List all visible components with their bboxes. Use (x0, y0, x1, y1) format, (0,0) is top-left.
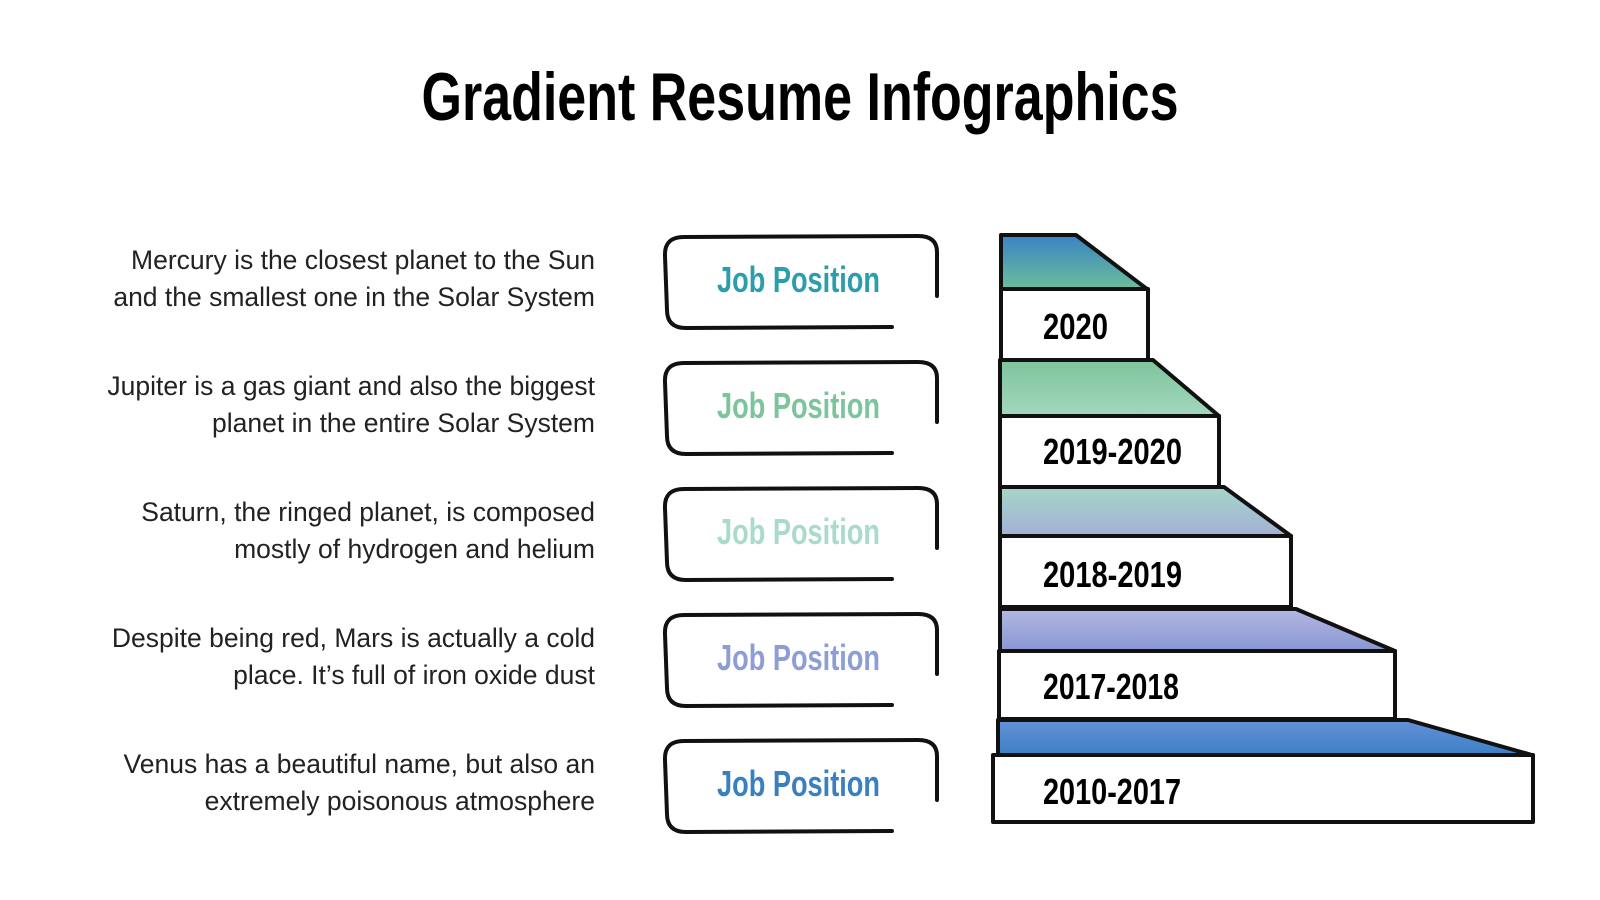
text: venus (124, 749, 595, 816)
year labels (1043, 306, 1182, 812)
job labels (717, 259, 880, 804)
text: jupiter (107, 371, 595, 438)
job labels: Job Position (717, 511, 880, 552)
text: mars: Despite being red, Mars is actually a cold (112, 623, 595, 653)
text: mars (112, 623, 595, 690)
text: saturn: Saturn, the ringed planet, is composed (141, 497, 595, 527)
staircase (993, 235, 1533, 822)
text: saturn (141, 497, 595, 564)
year labels: 2010-2017 (1043, 771, 1181, 812)
title: Gradient Resume Infographics (422, 59, 1178, 135)
year labels: 2017-2018 (1043, 666, 1179, 707)
text: mercury: Mercury is the closest planet to the Sun (131, 245, 595, 275)
job boxes (665, 236, 937, 832)
text: venus: Venus has a beautiful name, but also an (124, 749, 595, 779)
job labels: Job Position (717, 637, 880, 678)
job labels: Job Position (717, 385, 880, 426)
text: jupiter: Jupiter is a gas giant and also the biggest (107, 371, 595, 401)
job labels: Job Position (717, 259, 880, 300)
year labels: 2020 (1043, 306, 1108, 347)
job labels: Job Position (717, 763, 880, 804)
year labels: 2019-2020 (1043, 431, 1182, 472)
year labels: 2018-2019 (1043, 554, 1182, 595)
text: jupiter: planet in the entire Solar System (212, 408, 595, 438)
text: mars: place. It’s full of iron oxide dust (233, 660, 595, 690)
text: mercury (113, 245, 595, 312)
text: saturn: mostly of hydrogen and helium (234, 534, 595, 564)
text: venus: extremely poisonous atmosphere (205, 786, 595, 816)
text: mercury: and the smallest one in the Solar System (113, 282, 595, 312)
